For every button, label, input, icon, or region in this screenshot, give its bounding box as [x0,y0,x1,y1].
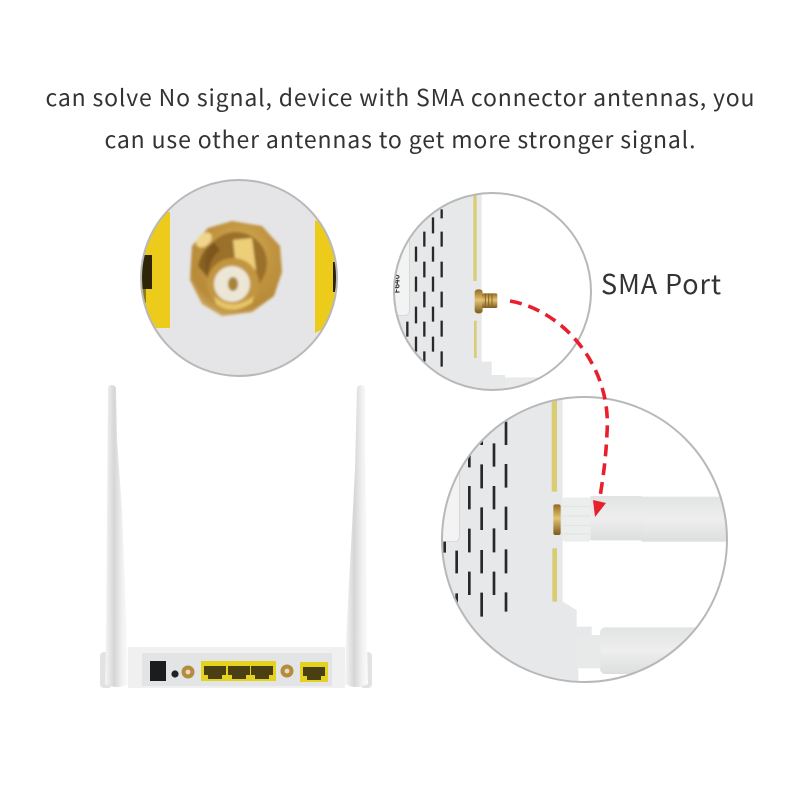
icon: SMA port connector [475,289,497,313]
panel: close-up of SMA connector [140,178,340,378]
power socket [150,661,166,681]
SMA jack right [280,664,294,678]
panel: router side with SMA port: F640 [391,274,402,293]
heading text [46,79,754,155]
LAN ports [201,661,276,681]
icon: gold connector [190,221,282,316]
router back view with antennas [100,385,372,688]
heading text: can solve No signal, device with SMA connector antennas, you [46,79,754,113]
label: SMA Port: SMA Port [601,263,721,302]
WAN port [300,662,328,682]
antenna two [578,628,695,674]
arrow: dashed red from port to antenna [510,301,607,517]
heading text: can use other antennas to get more stronger signal. [104,121,696,155]
antenna one [563,496,731,542]
router body [100,647,372,688]
right antenna [345,385,368,687]
panel: router side with SMA port [390,190,600,395]
reset button [171,670,179,678]
panel: antenna attached to SMA port [440,390,733,685]
left antenna [105,385,128,687]
SMA jack left [182,666,194,678]
icon: brass thread [553,504,561,535]
